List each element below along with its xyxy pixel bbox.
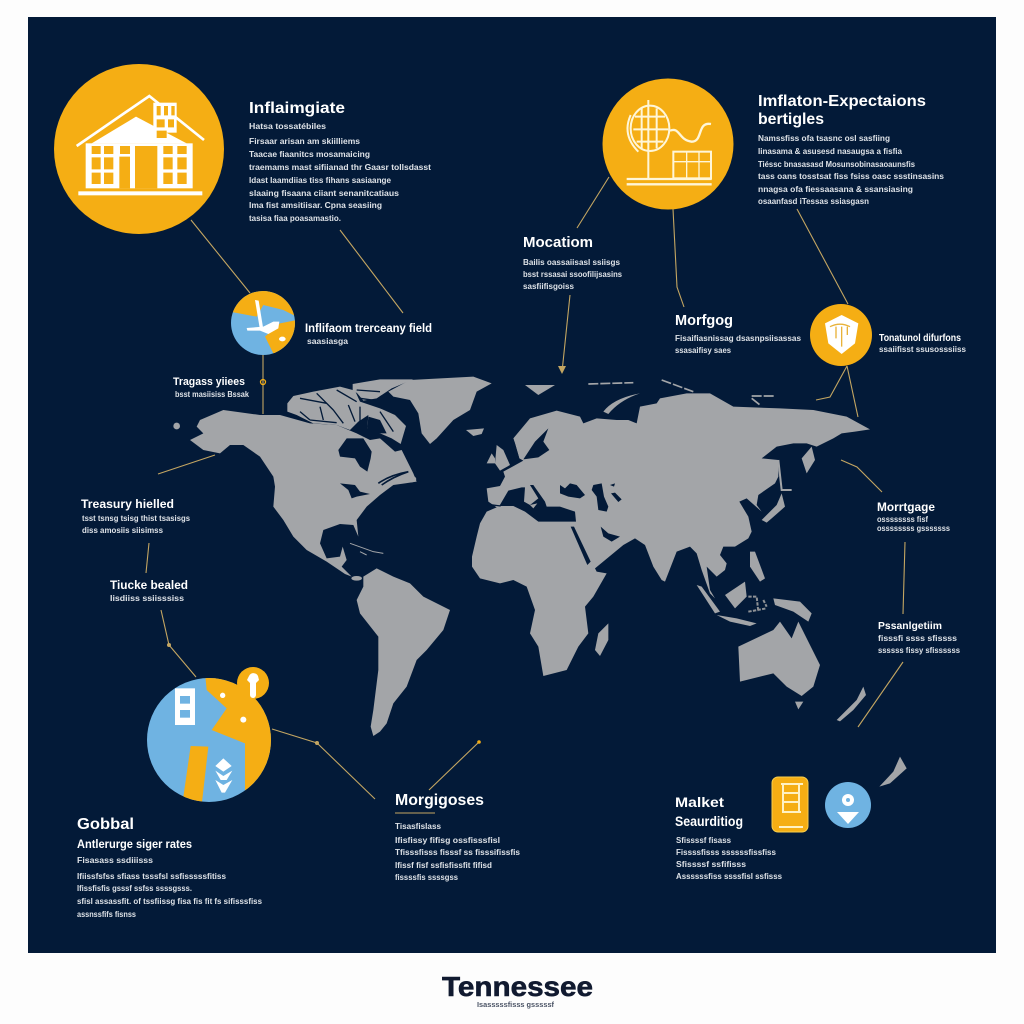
Panama link [351,576,362,581]
heading: Inflation-Expectations: tass oans tosstsat fiss fsiss oasc ssstinsasins [758,171,944,181]
text block: Morgigoses: Ifisfissy fifisg ossfisssfisl [395,835,500,845]
label: Mortgage: Morrtgage [877,502,935,514]
Japan [762,493,785,523]
Arctic channels [300,390,393,432]
end marker [477,740,481,744]
Red Sea [571,527,591,565]
world map [173,377,907,787]
text block: Malket Seaurditiog: Malket [675,794,724,810]
heading: Inflaimgiate: Hatsa tossatébiles [249,121,326,131]
label: Tiucke bealed [110,580,188,603]
label: Pssanlgetiim: fisssfi ssss sfissss [878,633,957,643]
text block: Morfgog: Fisaifiasnissag dsasnpsiisassas [675,333,801,343]
heading: Inflation-Expectations [758,93,944,206]
label: Tonatunol difurfons: ssaiifisst ssusosssiiss [879,344,966,354]
heading: Inflation-Expectations: nnagsa ofa fiessaasana & ssansiasing [758,184,913,194]
label: Mortgage: ossssssss fisf [877,514,928,524]
heading: Inflaimgiate: Firsaar arisan am skiilliems [249,136,360,146]
heading: Inflation-Expectations: osaanfasd iTessas ssiasgasn [758,196,869,206]
junction marker right [315,741,319,745]
text block: Malket Seaurditiog [675,794,782,881]
text block: Malket Seaurditiog: Seaurditiog [675,813,743,829]
Australia [738,622,820,696]
heading: Inflation-Expectations: bertigles [758,111,824,128]
text block: Mocation [523,234,622,291]
Hudson Bay [338,438,372,472]
Small lake [610,483,615,487]
Great Lakes [340,483,370,498]
label: Mortgage: ossssssss gsssssss [877,523,950,533]
label: Pssanlgetiim: Pssanlgetiim [878,620,942,632]
Sakhalin [802,447,815,473]
Newfoundland [405,476,416,482]
Ireland [487,453,495,463]
New Guinea [773,598,812,622]
Caspian Sea [592,483,608,512]
label: Treasury hielled: diss amosiis siisimss [82,525,163,535]
heading: Inflaimgiate: slaaing fisaana ciiant senanitcatiaus [249,188,399,198]
label: Inflation treasury yield: Inflifaom trerceany ﬁeld [305,321,432,335]
icon: globe and chart in gold circle [602,78,734,210]
icon: gold building tile [772,777,808,832]
label: Tonatunol difurfons [879,333,966,354]
label: Inflation treasury yield: saasiasga [307,336,348,346]
text block: Morfgog [675,312,801,355]
label: Tragass yiiees [173,376,249,399]
Foxe Basin [367,417,387,433]
underline [395,812,435,814]
label: Pssanlgetiim: ssssss fissy sfissssss [878,645,960,655]
Sumatra [697,585,720,613]
label: Tragass yiiees: bsst masiisiss Bssak [175,389,249,399]
Java [717,615,757,626]
label: Tiucke bealed: Iisdiiss ssiisssiss [110,593,184,603]
text block: Gobbal: sfisl assassfit. of tssfiissg fisa fis fit fs sifisssfiss [77,896,262,906]
text block: Malket Seaurditiog: Sfissssf fisass [676,835,731,845]
Black Sea [560,483,585,498]
Novaya Zemlya [603,393,640,414]
text block: Morgigoses: Tfisssfisss fisssf ss fisssifissfis [395,847,520,857]
Iceland [466,428,484,436]
Sicily [530,503,537,508]
text block: Mocation: sasfiifisgoiss [523,281,574,291]
text block: Morgigoses: fissssfis ssssgss [395,872,458,882]
Tasmania [795,702,803,709]
North America [190,410,417,577]
text block: Mocation: bsst rssasai ssoofilijsasins [523,269,622,279]
Philippines [750,552,765,582]
text block: Morfgog: Morfgog [675,312,733,329]
ring marker [260,380,266,384]
Eurasia and Africa [472,393,870,676]
label: Treasury hielled: Treasury hielled [81,497,174,511]
heading: Inflation-Expectations: Iinasama & asusesd nasaugsa a fisfia [758,146,902,156]
Borneo [725,582,747,608]
Greenland [388,377,492,444]
Sulawesi and Indonesian islands [748,597,767,612]
South America [357,568,450,736]
Madagascar [595,623,608,656]
heading: Inflation-Expectations: Tiéssc bnasasasd Mosunsobinasaoaunsfis [758,159,915,169]
label: Mortgage [877,502,950,533]
connector lines [146,177,905,799]
label: Tragass yiiees: Tragass yiiees [173,376,245,388]
Gulf of St Lawrence [378,472,408,485]
map: Americas and Greenland [173,377,492,736]
heading: Inflaimgiate: tasisa fiaa poasamastio. [249,213,341,223]
text block: Gobbal: Antlerurge siger rates [77,839,192,851]
text block: Gobbal [77,816,262,919]
label: Tonatunol difurfons: Tonatunol difurfons [879,333,961,344]
North Sea strip [511,438,519,459]
text block: Malket Seaurditiog: Fissssfisss ssssssfissfiss [676,847,776,857]
Arctic slivers [588,380,775,405]
footer title: Tennessee: Isasssssfisss gsssssf [477,1000,554,1009]
text block: Gobbal: assnssfifs fisnss [77,909,136,919]
heading: Inflaimgiate: Idast Iaamdiias tiss fihans sasiaange [249,175,391,185]
text block: Gobbal: Fisasass ssdiiisss [77,855,153,865]
arrowhead [558,366,566,374]
icon: shield in gold circle [810,304,872,366]
heading: Inflaimgiate: Ima fist amsitiisar. Cpna seasiing [249,200,382,210]
heading: Inflation-Expectations: Imflaton-Expectaions [758,93,926,110]
text block: Gobbal: Ifiissfsfss sfiass tsssfsl ssfisssssfitiss [77,871,226,881]
Aleutian island [173,423,180,429]
text block: Morfgog: ssasaifisy saes [675,345,731,355]
heading: Inflaimgiate: Taacae fiaanitcs mosamaicing [249,149,370,159]
text block: Morgigoses: Ifissf fisf ssfisfissfit fifisd [395,860,492,870]
text block: Malket Seaurditiog: Sfissssf ssfifisss [676,859,746,869]
text block: Morgigoses: Tisasfislass [395,821,441,831]
junction marker [167,643,171,647]
label: Pssanlgetiim [878,620,960,655]
Svalbard [525,385,555,395]
Gibraltar strait [487,504,501,506]
text block: Morgigoses [395,792,520,882]
heading: Inflation-Expectations: Namssfiss ofa tsasnc osl sasfiing [758,133,890,143]
Caribbean islands [350,543,383,555]
icon: house in gold circle [54,64,224,234]
label: Treasury hielled [81,497,190,535]
New Zealand north [837,687,866,721]
map: Europe, Africa, Asia, Oceania [472,380,907,787]
text block: Morgigoses: Morgigoses [395,792,484,809]
text block: Gobbal: Gobbal [77,816,134,833]
label: Inflation treasury yield [305,321,432,346]
Mediterranean Sea [499,485,576,522]
footer title: Tennessee: Tennessee [442,971,593,1002]
heading: Inflaimgiate: traemams mast sifiianad thr Gaasr tollsdasst [249,162,431,172]
Aral Sea [611,493,622,502]
text block: Mocation: Bailis oassaiisasl ssiisgs [523,257,620,267]
label: Tiucke bealed: Tiucke bealed [110,580,188,592]
heading: Inflaimgiate [249,100,431,223]
icon: treasury small circle [230,290,297,355]
Persian Gulf [601,527,620,542]
text block: Malket Seaurditiog: Assssssfiss ssssfisl ssfisss [676,871,782,881]
icon: blue circle with heart [825,782,871,828]
text block: Mocation: Mocatiom [523,234,593,251]
Kuril chain [778,460,792,490]
New Zealand south [879,757,907,787]
icon: global circle with building and tree [147,667,277,805]
Arctic Archipelago [287,387,406,444]
text block: Gobbal: Ifissfisfis gsssf ssfss ssssgsss. [77,883,192,893]
Ellesmere Island [353,379,413,401]
Great Britain [495,445,510,471]
heading: Inflaimgiate: Inflaimgiate [249,100,345,117]
label: Treasury hielled: tsst tsnsg tsisg thist tsasisgs [82,513,190,523]
Baltic Sea [523,428,549,459]
